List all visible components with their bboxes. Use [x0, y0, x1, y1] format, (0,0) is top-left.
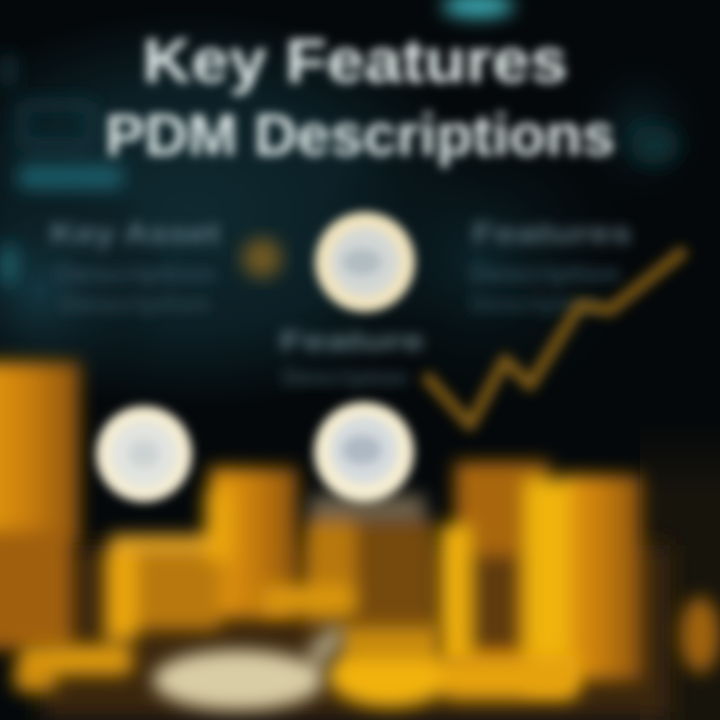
title — [105, 27, 615, 168]
shadow floor — [40, 545, 670, 720]
text block: right feature: Description — [470, 261, 620, 288]
title: Key Features — [142, 27, 568, 96]
text block: center feature: Description — [282, 365, 408, 390]
gold coin stacks — [0, 362, 720, 720]
coin pile: bottom gold — [328, 597, 720, 707]
text block: center feature: Feature — [280, 325, 424, 356]
title: PDM Descriptions — [105, 103, 615, 168]
text block: left feature: Description — [55, 261, 215, 288]
text block: right feature: Description — [470, 291, 600, 318]
coin stack: right tall — [440, 462, 642, 690]
decorative teal accents — [0, 0, 679, 287]
coin stack: steps left — [14, 468, 298, 692]
coin stack: far left — [0, 362, 80, 650]
text block: center feature — [280, 325, 424, 390]
text block: right feature: Features — [472, 217, 632, 250]
icon: left medallion — [96, 406, 192, 502]
text block: right feature — [470, 217, 632, 318]
text block: left feature: Description — [60, 291, 210, 318]
icon: center lower medallion — [314, 402, 414, 502]
chart: rising gold trend line — [425, 250, 685, 425]
icon: center top medallion — [315, 212, 415, 312]
text block: left feature: Key Asset — [50, 217, 220, 250]
coin: pale flat coin — [153, 622, 345, 710]
icon: small gold coin — [242, 238, 282, 278]
text block: left feature — [50, 217, 220, 318]
coin stack: center — [260, 495, 435, 630]
